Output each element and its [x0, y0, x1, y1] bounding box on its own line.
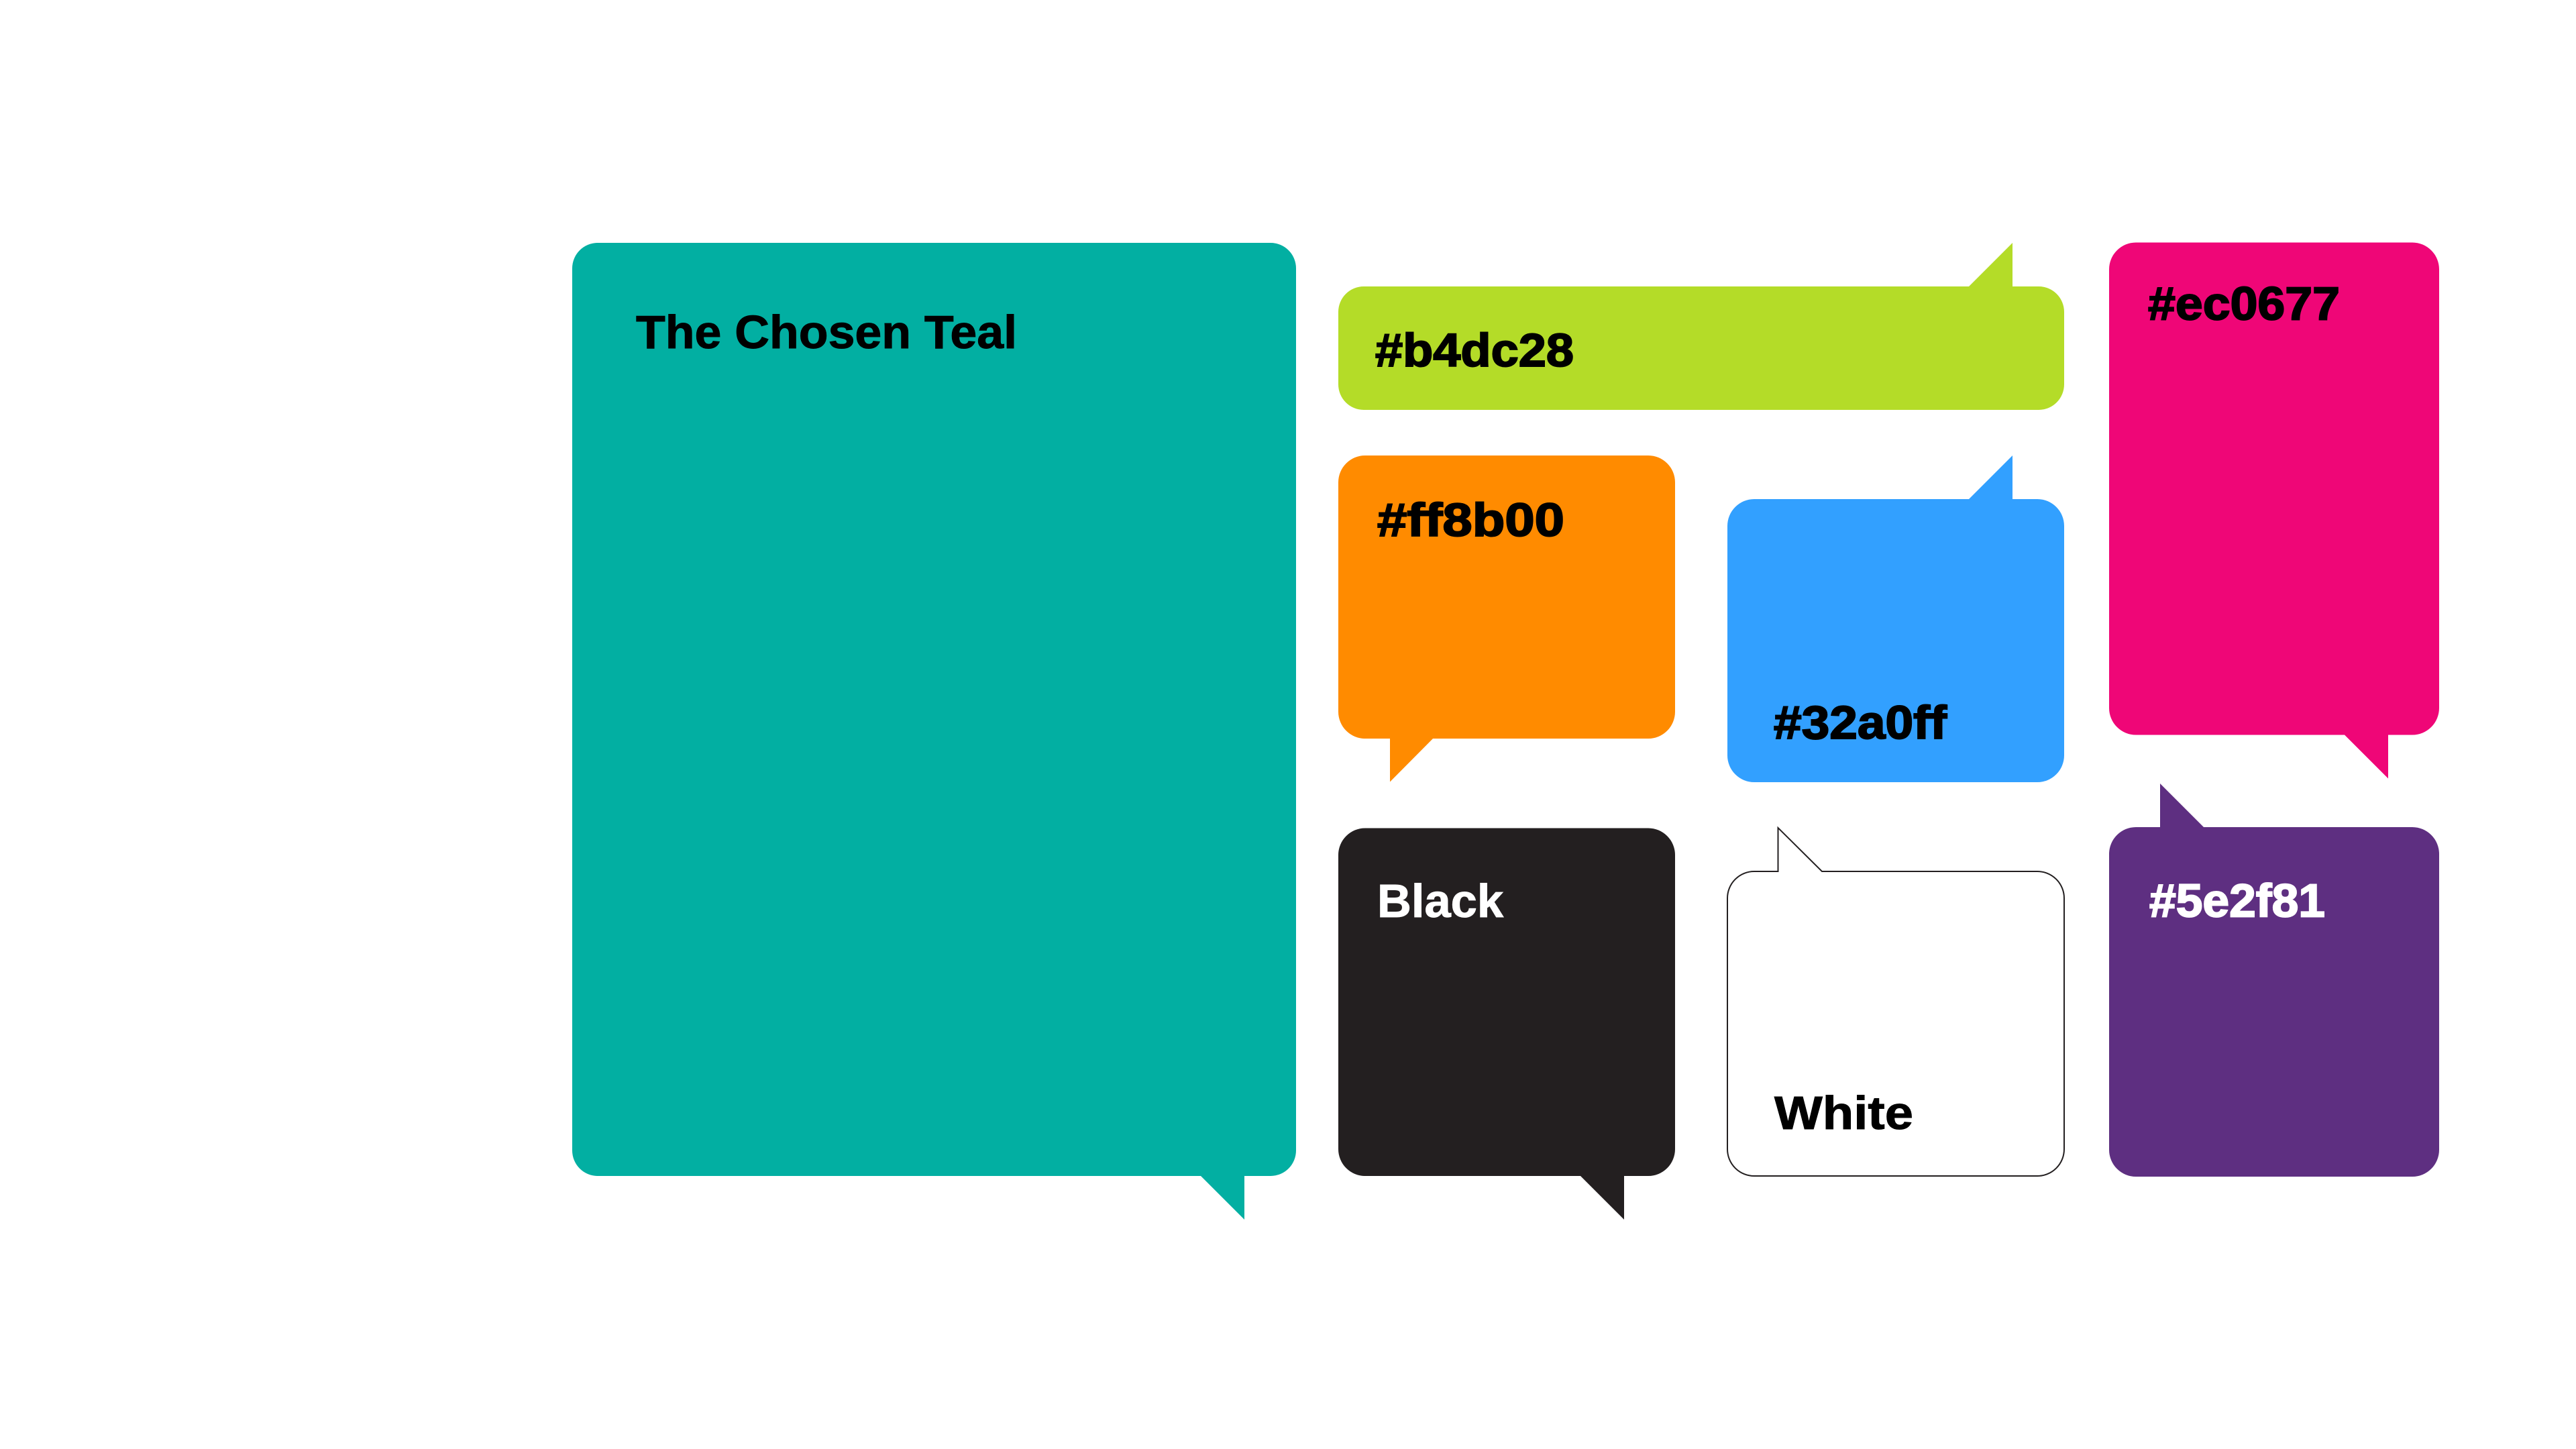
blue label: #32a0ff	[1774, 696, 1947, 749]
orange bubble shape with tail bottom left	[1338, 455, 1675, 782]
lime bubble shape with tail top right	[1338, 243, 2064, 410]
pink label: #ec0677	[2148, 278, 2340, 330]
black bubble shape with tail bottom right	[1338, 828, 1675, 1220]
panel: black bubble	[1338, 828, 1675, 1220]
panel: white bubble	[1727, 828, 2064, 1176]
panel: pink bubble	[2109, 243, 2439, 778]
teal label: The Chosen Teal	[636, 306, 1017, 358]
orange label: #ff8b00	[1377, 494, 1564, 546]
panel: The Chosen Teal bubble	[572, 243, 1296, 1220]
panel: lime bubble	[1338, 243, 2064, 410]
panel: blue bubble	[1727, 455, 2064, 782]
purple label: #5e2f81	[2149, 875, 2325, 927]
blue bubble shape with tail top right	[1727, 455, 2064, 782]
purple bubble shape with tail top left	[2109, 784, 2439, 1177]
lime label: #b4dc28	[1375, 324, 1574, 376]
white label: White	[1774, 1087, 1913, 1139]
white bubble outline with tail top left	[1727, 828, 2064, 1176]
panel: purple bubble	[2109, 784, 2439, 1177]
black label: Black	[1377, 875, 1503, 927]
panel: orange bubble	[1338, 455, 1675, 782]
teal bubble shape with tail bottom right	[572, 243, 1296, 1220]
pink bubble shape with tail bottom right	[2109, 243, 2439, 778]
